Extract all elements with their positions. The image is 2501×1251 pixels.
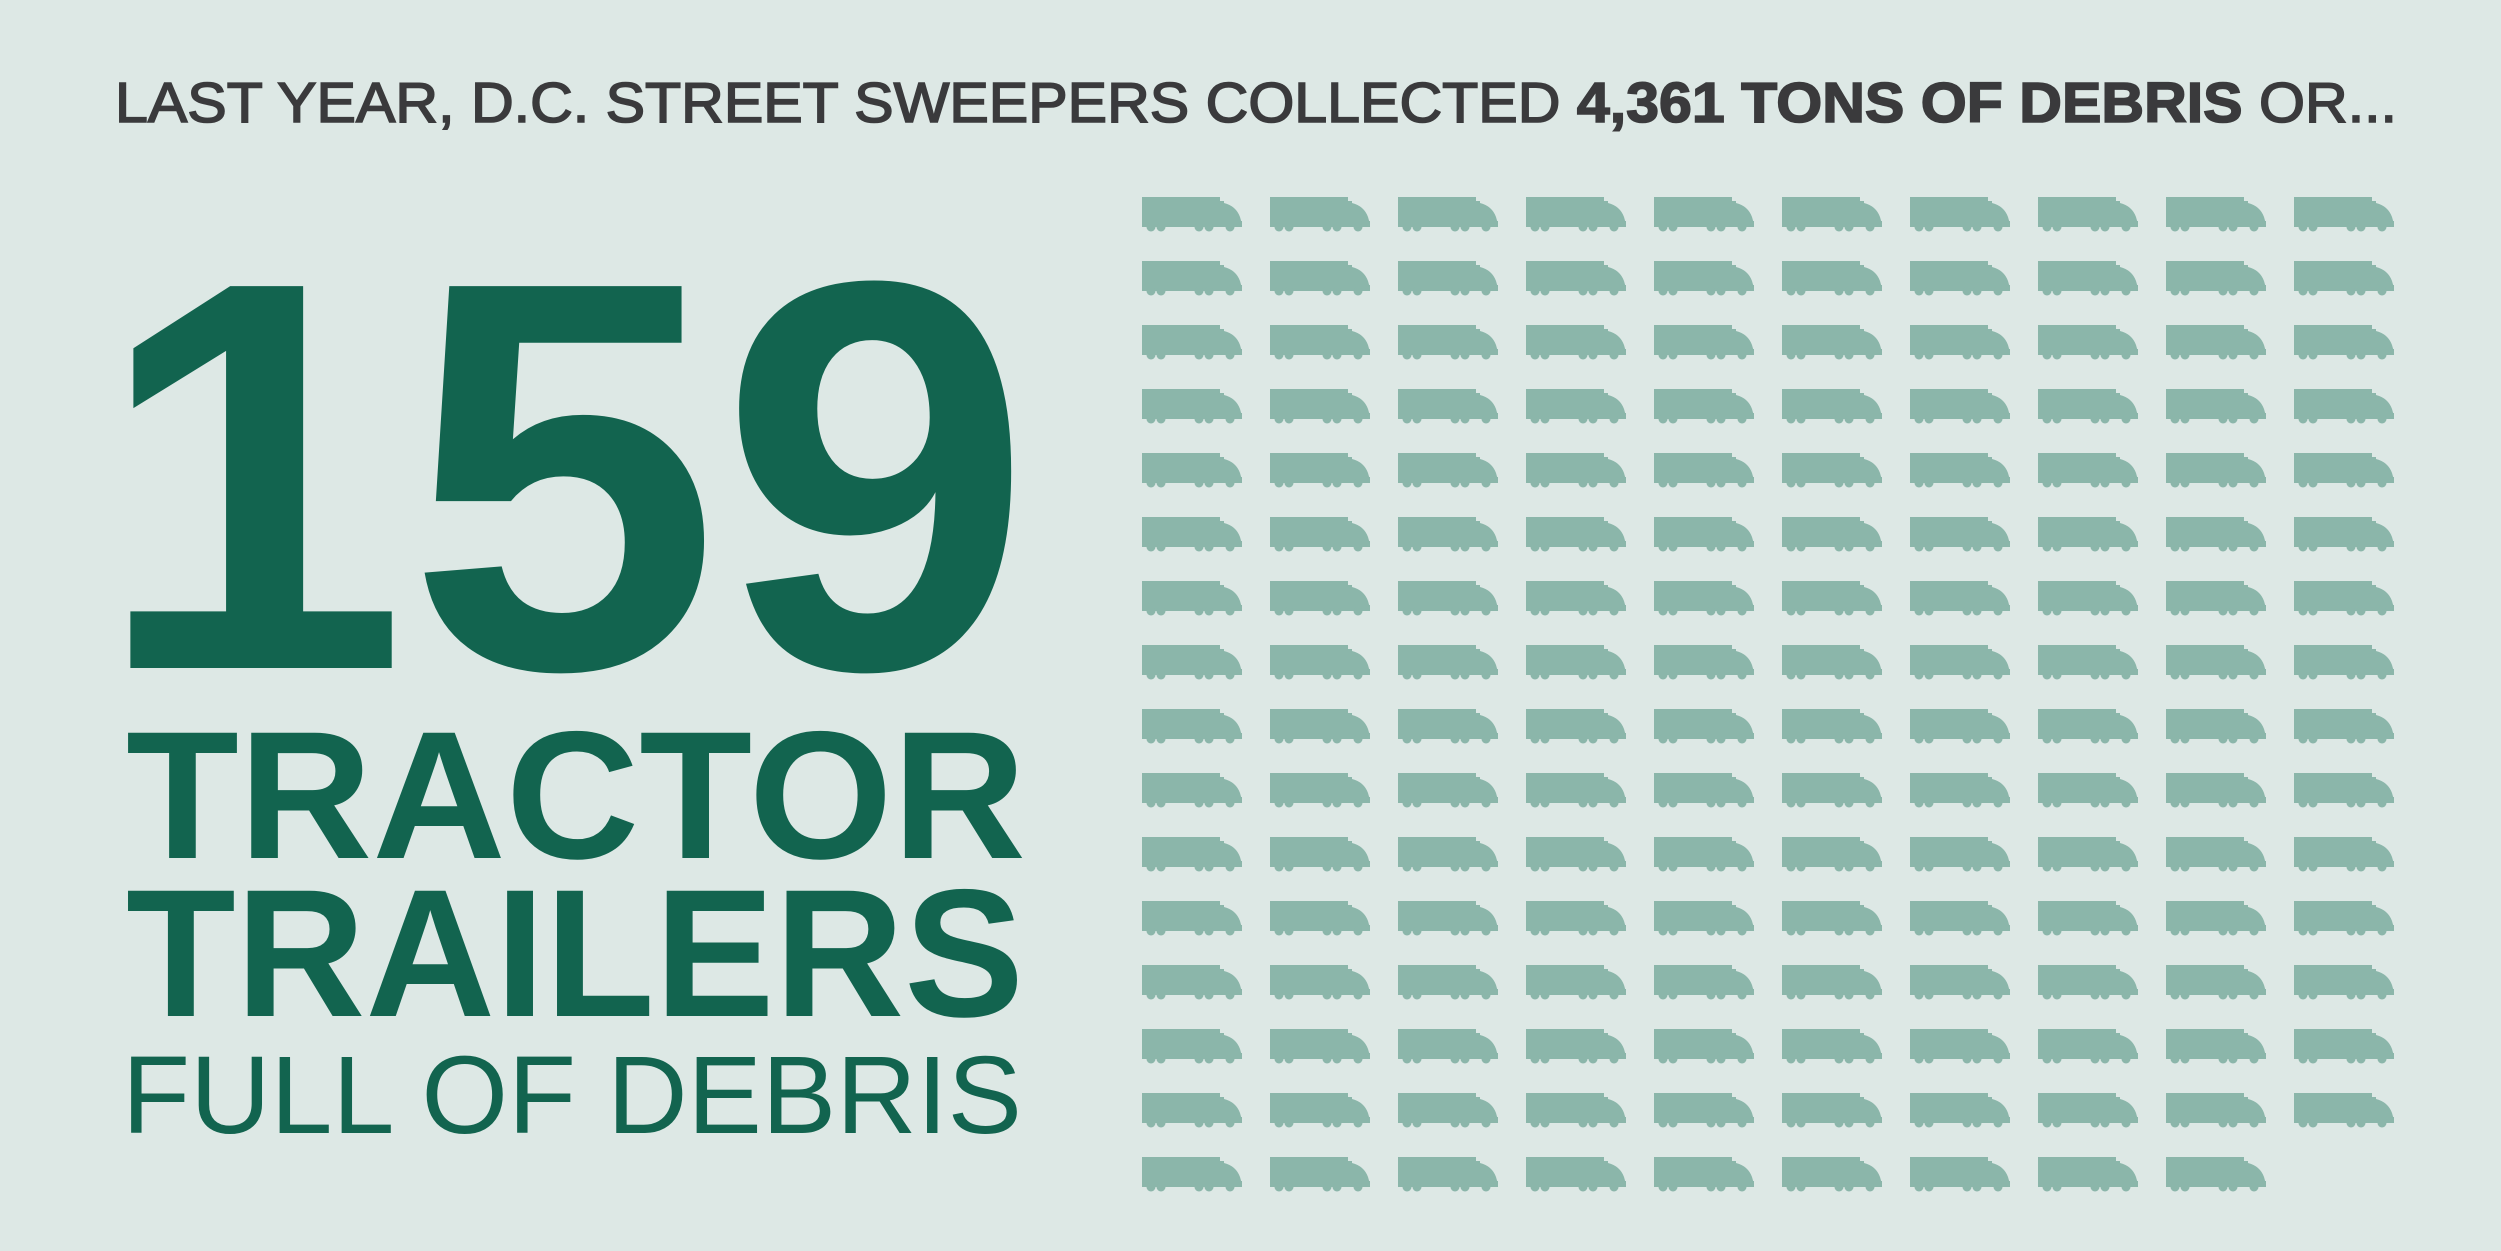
title: LAST YEAR, D.C. STREET SWEEPERS COLLECTED 4,361 TONS OF DEBRIS OR...: [115, 71, 2397, 135]
big number 159: 159: [95, 166, 1032, 786]
subheading: full of debris: FULL OF DEBRIS: [122, 1034, 1022, 1157]
icon grid: 159 trucks: [1142, 197, 2394, 1192]
heading: tractor: TRACTOR: [126, 693, 1026, 897]
heading: trailers: TRAILERS: [126, 851, 1024, 1055]
